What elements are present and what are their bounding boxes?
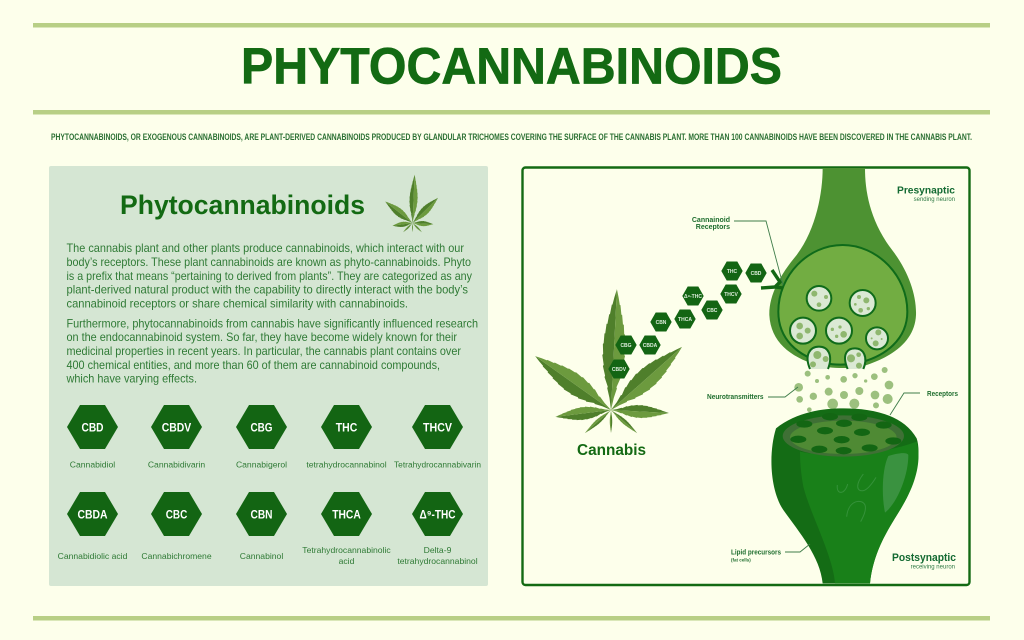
paragraph one: is a prefix that means “pertaining to derived from plants”. They are categorized as any bbox=[66, 270, 472, 283]
compound: CBD bbox=[67, 405, 118, 470]
molecule: CBD: CBD bbox=[751, 271, 762, 277]
callout: lipid precursors bbox=[731, 544, 810, 562]
compound: THCA bbox=[302, 492, 391, 566]
compound: THC: THC bbox=[336, 420, 358, 434]
paragraph two: which have varying effects. bbox=[66, 372, 197, 386]
molecule: THCV: THCV bbox=[724, 292, 738, 298]
compound: CBDV: CBDV bbox=[162, 420, 191, 434]
paragraph two bbox=[66, 318, 478, 386]
cannabinoid receptor bbox=[761, 270, 783, 288]
callout: receptors bbox=[890, 391, 958, 415]
molecule: THC bbox=[721, 262, 743, 280]
callout: lipid precursors: Lipid precursors bbox=[731, 550, 781, 556]
molecule: CBD bbox=[745, 264, 767, 282]
compound: delta-9 THC: Δ⁹-THC bbox=[420, 508, 456, 522]
molecule: CBDA: CBDA bbox=[643, 343, 658, 349]
compound: THCV bbox=[394, 405, 481, 470]
callout: cannabinoid receptors: Receptors bbox=[696, 224, 730, 231]
compound: THCA: THCA bbox=[332, 508, 361, 522]
molecule: THC: THC bbox=[727, 269, 738, 275]
compound: CBN: CBN bbox=[250, 508, 272, 522]
molecule: CBN bbox=[650, 312, 672, 332]
compound: THCA: acid bbox=[339, 556, 355, 566]
molecule: CBG bbox=[615, 336, 637, 354]
paragraph one: plant-derived natural product with the capability to directly interact with the body’s bbox=[66, 284, 468, 296]
paragraph one bbox=[66, 242, 472, 310]
compound: THCV: THCV bbox=[423, 420, 452, 434]
callout: neurotransmitters: Neurotransmitters bbox=[707, 394, 764, 401]
paragraph two: Furthermore, phytocannabinoids from cannabis have significantly influenced research bbox=[66, 318, 478, 330]
compound: CBN: Cannabinol bbox=[240, 551, 283, 561]
molecule: CBG: CBG bbox=[620, 343, 632, 349]
molecule: CBDA bbox=[639, 336, 661, 354]
callout: lipid precursors: (fat cells) bbox=[731, 558, 751, 562]
panel background bbox=[49, 166, 488, 586]
paragraph one: cannabinoid receptors or share chemical similarity with cannabinoids. bbox=[66, 298, 408, 310]
presynaptic neuron bbox=[769, 168, 916, 369]
compound: CBDV bbox=[148, 405, 205, 470]
compound: CBDV: Cannabidivarin bbox=[148, 460, 205, 470]
diagram frame bbox=[522, 168, 970, 585]
panel: phytocannabinoids overview bbox=[49, 166, 488, 586]
label: postsynaptic: receiving neuron bbox=[911, 564, 955, 570]
molecule: CBC: CBC bbox=[707, 308, 718, 314]
compound: CBG: CBG bbox=[250, 420, 272, 434]
label: postsynaptic bbox=[892, 552, 956, 570]
compound: CBC: Cannabichromene bbox=[141, 551, 212, 561]
neurotransmitters bbox=[794, 367, 893, 412]
molecule: delta-9 THC: Δ⁹-THC bbox=[684, 294, 702, 300]
compound: CBD: Cannabidiol bbox=[70, 460, 115, 470]
label: Cannabis: Cannabis bbox=[577, 442, 646, 459]
molecule: CBN: CBN bbox=[656, 320, 667, 326]
compound: CBG: Cannabigerol bbox=[236, 460, 287, 470]
title: PHYTOCANNABINOIDS bbox=[241, 38, 782, 94]
paragraph one: body’s receptors. These plant cannabinoids are known as phyto-cannabinoids. Phyto bbox=[66, 256, 471, 269]
compound: THCA: Tetrahydrocannabinolic bbox=[302, 545, 391, 555]
label: presynaptic: Presynaptic bbox=[897, 184, 955, 196]
cannabis plant bbox=[529, 289, 689, 435]
compound: CBD: CBD bbox=[82, 420, 104, 434]
bottom rule bbox=[33, 616, 990, 620]
molecule: THCV bbox=[720, 284, 742, 304]
label: presynaptic bbox=[897, 184, 955, 203]
icon: cannabis leaf bbox=[383, 174, 441, 233]
compound: CBDA: Cannabidiolic acid bbox=[58, 551, 128, 561]
label: postsynaptic: Postsynaptic bbox=[892, 552, 956, 564]
callout: receptors: Receptors bbox=[927, 391, 958, 398]
compound: CBDA: CBDA bbox=[78, 508, 108, 522]
molecule: CBC bbox=[701, 300, 723, 320]
compound: CBC bbox=[141, 492, 212, 561]
callout: neurotransmitters bbox=[707, 387, 798, 401]
panel heading: Phytocannabinoids bbox=[120, 190, 365, 220]
molecule: CBDV: CBDV bbox=[612, 367, 627, 373]
paragraph two: medicinal properties in recent years. In particular, the cannabis plant contains over bbox=[66, 345, 461, 358]
compound: THCV: Tetrahydrocannabivarin bbox=[394, 460, 481, 470]
compound: delta-9 THC bbox=[397, 492, 478, 566]
postsynaptic neuron bbox=[771, 408, 919, 583]
compound: delta-9 THC: tetrahydrocannabinol bbox=[397, 556, 478, 566]
label: presynaptic: sending neuron bbox=[914, 197, 955, 203]
compound: CBC: CBC bbox=[166, 508, 188, 522]
molecule: THCA bbox=[674, 310, 696, 328]
paragraph one: The cannabis plant and other plants produce cannabinoids, which interact with our bbox=[66, 242, 464, 255]
compound: delta-9 THC: Delta-9 bbox=[424, 545, 452, 555]
callout: cannabinoid receptors bbox=[692, 217, 783, 285]
paragraph two: on the endocannabinoid system. So far, they have become widely known for their bbox=[66, 331, 457, 344]
callout: cannabinoid receptors: Cannainoid bbox=[692, 217, 730, 224]
title lower rule bbox=[33, 110, 990, 114]
compound: THC: tetrahydrocannabinol bbox=[306, 460, 387, 470]
molecule: CBDV bbox=[608, 360, 630, 378]
paragraph two: 400 chemical entities, and more than 60 of them are cannabinoid compounds, bbox=[66, 359, 440, 372]
top rule bbox=[33, 23, 990, 28]
compound: CBN bbox=[236, 492, 287, 561]
panel: synapse diagram bbox=[522, 168, 970, 585]
compound: CBG bbox=[236, 405, 287, 470]
compound: CBDA bbox=[58, 492, 128, 561]
compound: THC bbox=[306, 405, 387, 470]
molecule: delta-9 THC bbox=[682, 286, 704, 306]
molecule: THCA: THCA bbox=[678, 317, 692, 323]
